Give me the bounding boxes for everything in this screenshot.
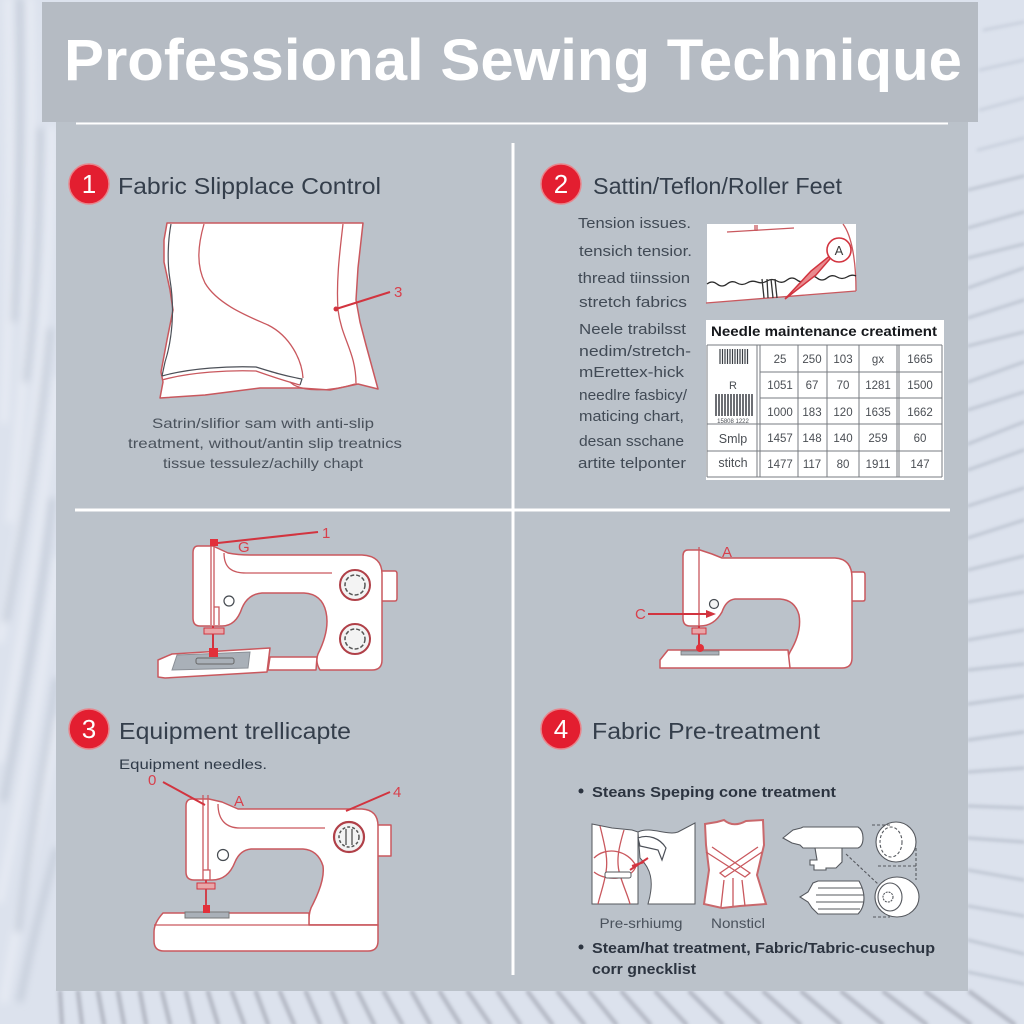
needle maintenance table: stitch: [718, 456, 748, 470]
panel 1 caption: treatment, without/antin slip treatnics: [128, 435, 402, 451]
panel 2 notes: needlre fasbicy/: [579, 387, 688, 404]
panel 1: fabric slippage control: [69, 164, 402, 471]
stitch tension illustration: A: [835, 243, 844, 258]
callout 1: 1: [322, 525, 330, 542]
title band: [42, 2, 978, 122]
callout arrow 3: 3: [394, 284, 402, 301]
heading 3: Equipment trellicapte: [119, 718, 351, 744]
step 2 badge: 2: [554, 169, 568, 199]
heading 4: Fabric Pre-treatment: [592, 718, 821, 744]
needle maintenance table: 120: [833, 407, 853, 419]
step 2 badge: [541, 164, 581, 204]
stitch tension illustration: [706, 224, 856, 303]
panel 2 notes: Neele trabilsst: [579, 321, 687, 338]
panel 2 notes: artite telponter: [578, 455, 686, 472]
dividers: [75, 124, 950, 975]
needle maintenance table: 1051: [767, 380, 793, 392]
bullet: steam hot treatment: [578, 940, 935, 978]
needle maintenance table: [706, 320, 944, 480]
step 1 badge: [69, 164, 109, 204]
step 4 badge: 4: [554, 714, 568, 744]
title: Professional Sewing Technique: [64, 28, 962, 93]
callouts 0 and 4: 4: [393, 784, 401, 801]
panel 2 notes: thread tiinssion: [578, 270, 690, 287]
callouts C and A: [635, 544, 732, 623]
barcode icons: [716, 349, 752, 416]
needle maintenance table: 67: [806, 380, 818, 392]
sewing machine, panel 4: [635, 544, 865, 668]
needle maintenance table: 1477: [767, 459, 793, 471]
step 4 badge: [541, 709, 581, 749]
sewing machine, panel 3 bottom: [148, 772, 401, 951]
panel 1 caption: [128, 415, 402, 471]
fabric illustration: [160, 223, 402, 398]
panel 2 notes: stretch fabrics: [579, 294, 687, 311]
panel 1 caption: Satrin/slifior sam with anti-slip: [152, 415, 374, 431]
step 3 badge: [69, 709, 109, 749]
needle maintenance table: Smlp: [719, 432, 747, 446]
needle maintenance table: 15808 1222: [717, 419, 750, 425]
needle maintenance table: 1635: [865, 407, 891, 419]
panel 2 notes: desan sschane: [579, 433, 684, 450]
needle maintenance table: 259: [868, 433, 888, 445]
sewing machine, panel 3 top: [158, 525, 397, 678]
needle maintenance table: 1000: [767, 407, 793, 419]
callouts 0 and 4: A: [234, 793, 244, 810]
callouts C and A: C: [635, 606, 646, 623]
panel 2 notes: maticing chart,: [579, 408, 684, 425]
panel 2 notes: mErettex-hick: [579, 364, 685, 381]
needle maintenance table: 1911: [866, 459, 890, 471]
main panel: [56, 122, 968, 991]
heading 1: Fabric Slipplace Control: [118, 173, 381, 199]
bullet: steam hot treatment: corr gnecklist: [592, 961, 696, 978]
callout arrow 3: [334, 284, 402, 312]
needle maintenance table: 148: [802, 433, 822, 445]
needle maintenance table: gx: [872, 354, 884, 366]
needle maintenance table: 117: [803, 459, 821, 471]
bullet: steam: Steans Speping cone treatment: [592, 784, 836, 801]
caption: Nonsticl: [711, 915, 765, 931]
caption: Pre-srhiumg: [600, 915, 682, 931]
needle maintenance table: 1281: [865, 380, 891, 392]
needle maintenance table: R: [729, 380, 737, 392]
equipment sub-heading: Equipment needles.: [119, 756, 267, 772]
needle maintenance table: 1457: [767, 433, 793, 445]
panel 3: equipment: [69, 525, 401, 951]
panel 2 notes: Tension issues.: [578, 215, 691, 232]
step 3 badge: 3: [82, 714, 96, 744]
needle maintenance table: 80: [837, 459, 849, 471]
needle maintenance table: 1665: [907, 354, 933, 366]
illustration: pre-shrinking: [592, 823, 695, 931]
needle maintenance table: 1662: [907, 407, 933, 419]
callout 1: [218, 525, 330, 556]
panel 2 notes: nedim/stretch-: [579, 343, 691, 360]
step 1 badge: 1: [82, 169, 96, 199]
panel 2: satin teflon roller feet: [541, 164, 944, 480]
panel 1 caption: tissue tessulez/achilly chapt: [163, 455, 363, 471]
callouts C and A: A: [722, 544, 732, 561]
panel 4: fabric pre-treatment: [541, 544, 935, 978]
panel 2 notes: tensich tensior.: [579, 243, 692, 260]
needle maintenance table: 1500: [907, 380, 933, 392]
needle maintenance table: 25: [774, 354, 786, 366]
bullet: steam hot treatment: Steam/hat treatment, Fabric/Tabric-cusechup: [592, 940, 935, 957]
callouts 0 and 4: 0: [148, 772, 156, 789]
panel 2 notes: [578, 215, 692, 472]
callout 1: G: [238, 539, 250, 556]
needle maintenance table: 147: [910, 459, 930, 471]
needle maintenance table: 103: [833, 354, 853, 366]
callouts 0 and 4: [148, 772, 401, 811]
heading 2: Sattin/Teflon/Roller Feet: [593, 173, 843, 199]
needle maintenance table: 183: [802, 407, 822, 419]
needle maintenance table: 250: [802, 354, 822, 366]
illustration: nonstick garment: [704, 820, 766, 931]
needle maintenance table: 60: [914, 433, 926, 445]
needle maintenance table: 70: [837, 380, 849, 392]
needle maintenance table: Needle maintenance creatiment: [711, 323, 937, 339]
needle maintenance table: 140: [833, 433, 853, 445]
illustration: presser feet and parts: [783, 822, 919, 917]
